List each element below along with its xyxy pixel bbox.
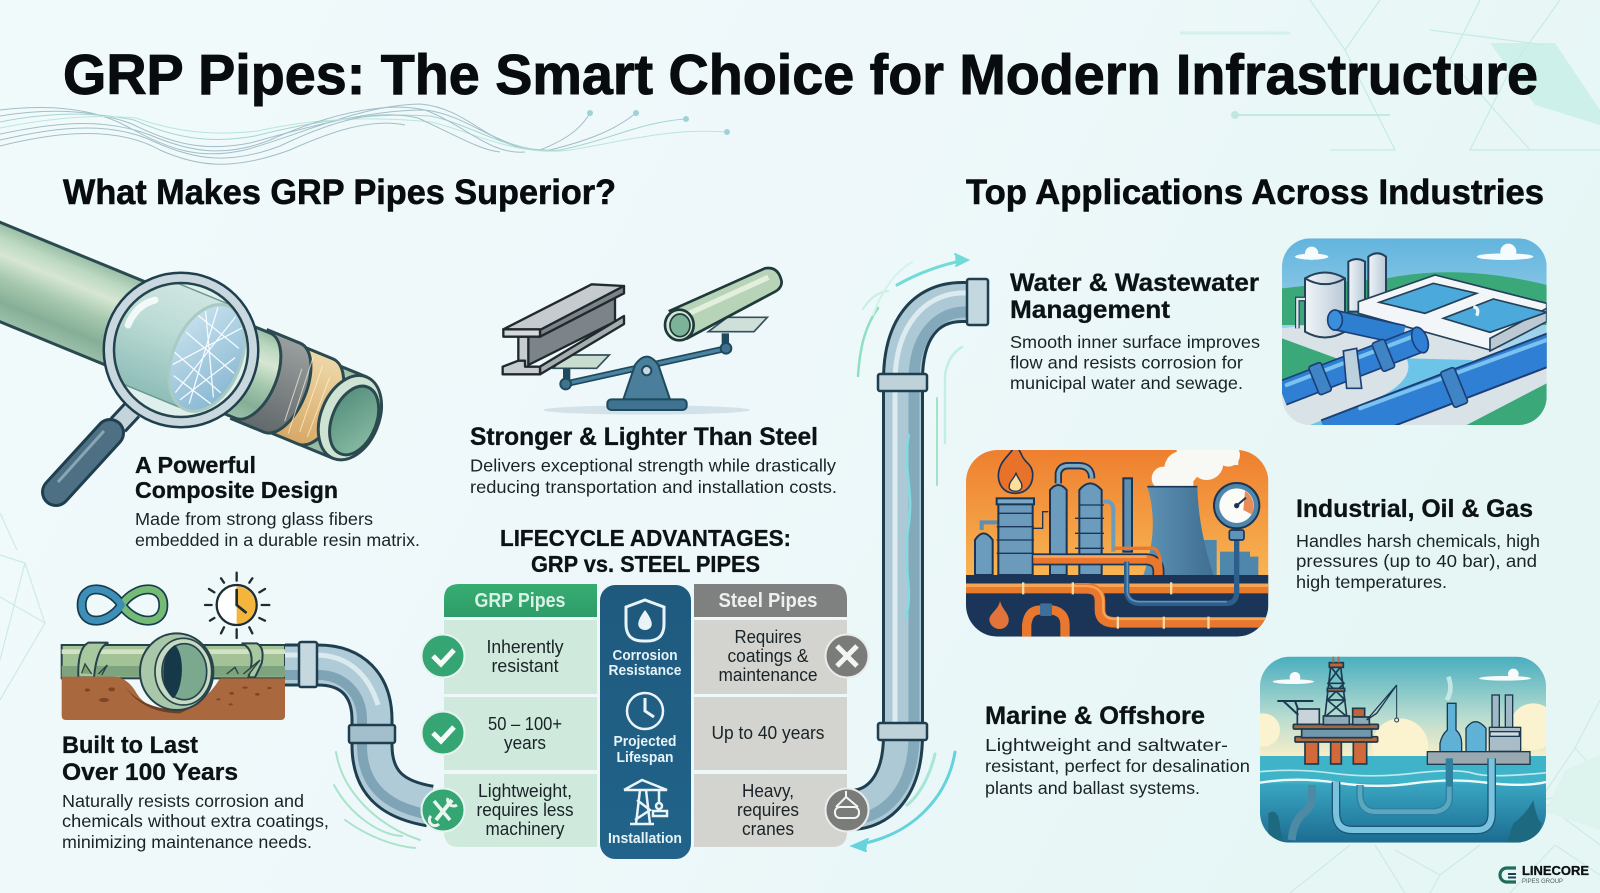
illustration: tall right pipe <box>850 254 988 851</box>
GRP column: 50 – 100+ <box>488 714 562 734</box>
illustration: oil and gas plant <box>966 443 1268 637</box>
steam <box>1152 450 1240 486</box>
steel column: Steel Pipes <box>718 590 818 612</box>
text block: built to last: Built to Last <box>62 732 198 759</box>
steel column <box>694 584 847 847</box>
steel column: coatings & <box>728 646 808 666</box>
steel I-beam <box>503 284 624 374</box>
application text: water: Water & Wastewater <box>1010 269 1259 297</box>
heading: right section: Top Applications Across Industries <box>966 173 1544 212</box>
GRP column: Lightweight, <box>478 781 572 801</box>
upper orange pipe <box>1033 546 1164 575</box>
center category column: Projected <box>614 734 676 750</box>
application text: industrial: Industrial, Oil & Gas <box>1296 495 1533 523</box>
icon: crane <box>624 780 667 824</box>
application text: marine: resistant, perfect for desalination <box>985 756 1250 776</box>
icon: tools <box>422 788 464 832</box>
GRP column <box>444 584 597 847</box>
text block: composite design: Made from strong glass fibers <box>135 509 373 529</box>
desalination plant <box>1447 677 1450 700</box>
application text: water: Smooth inner surface improves <box>1010 332 1260 352</box>
logo: PIPES GROUP <box>1522 878 1563 885</box>
center category column: Lifespan <box>616 750 674 766</box>
text block: composite design: A Powerful <box>135 452 256 478</box>
application text: industrial <box>1296 495 1540 592</box>
pressure gauge <box>1214 483 1259 540</box>
center category column: Installation <box>608 831 682 847</box>
application text: water: municipal water and sewage. <box>1010 373 1243 393</box>
swoosh arrows <box>852 254 968 851</box>
GRP column: requires less <box>476 800 574 820</box>
flame <box>998 443 1033 493</box>
GRP column: GRP Pipes <box>474 590 566 612</box>
application text: water <box>1010 269 1260 393</box>
icon: green check 2 <box>422 712 464 754</box>
icon: infinity <box>82 589 163 621</box>
illustration: balance scale steel vs GRP <box>503 268 782 415</box>
steel column: requires <box>737 800 799 820</box>
decorative wave dots <box>587 110 730 135</box>
tanks <box>1297 253 1386 337</box>
icon: clock and sun <box>205 573 269 638</box>
lower pipes <box>1027 538 1268 637</box>
center category column <box>598 584 692 860</box>
icon: clock <box>627 693 663 729</box>
application text: marine <box>985 702 1250 798</box>
application text: marine: Lightweight and saltwater- <box>985 735 1228 755</box>
blue pipes <box>1282 320 1557 435</box>
logo mark <box>1500 868 1516 882</box>
illustration: lower-left transparent pipe <box>285 642 430 848</box>
steel column: Requires <box>734 627 802 647</box>
pipe layers <box>0 212 396 471</box>
icon: shield <box>626 600 664 641</box>
steel column: cranes <box>742 819 794 839</box>
rig <box>1277 650 1399 764</box>
icon: grey cross <box>826 634 868 678</box>
GRP pipe <box>665 268 782 340</box>
GRP column: years <box>504 733 546 753</box>
decorative wave lines <box>0 104 727 164</box>
text block: built to last: Naturally resists corrosion and <box>62 791 304 811</box>
text block: composite design: Composite Design <box>135 477 338 503</box>
icon: green check 1 <box>422 634 464 678</box>
illustration: buried pipe with icons <box>62 573 285 720</box>
application text: industrial: Handles harsh chemicals, high <box>1296 531 1540 551</box>
application text: industrial: high temperatures. <box>1296 572 1447 592</box>
text block: stronger and lighter <box>470 423 837 497</box>
text block: built to last <box>62 732 329 852</box>
water stream <box>1310 358 1473 425</box>
illustration: offshore rig and desalination <box>1260 656 1546 843</box>
subsea pipes <box>1292 758 1492 840</box>
flanges <box>967 279 988 325</box>
basin <box>1358 275 1547 351</box>
application text: water: flow and resists corrosion for <box>1010 352 1243 372</box>
application text: marine: Marine & Offshore <box>985 702 1205 730</box>
center category column: Resistance <box>608 663 682 679</box>
text block: built to last: minimizing maintenance needs. <box>62 832 312 852</box>
application text: industrial: pressures (up to 40 bar), and <box>1296 551 1537 571</box>
pipe and soil <box>62 633 285 720</box>
illustration: composite pipe with magnifier <box>0 212 396 492</box>
decorative top-right geometry <box>1180 0 1600 150</box>
towers <box>975 466 1258 575</box>
GRP column: machinery <box>486 819 564 839</box>
motion swooshes <box>334 752 420 848</box>
magnifier lens <box>104 273 258 427</box>
heading: lifecycle advantages <box>500 525 791 577</box>
decorative left and bottom-right geometry <box>0 513 1600 893</box>
illustration: water treatment <box>1282 238 1557 435</box>
heading: lifecycle advantages: LIFECYCLE ADVANTAGES: <box>500 525 791 551</box>
text block: composite design: embedded in a durable resin matrix. <box>135 530 420 550</box>
logo: LINECORE <box>1522 863 1589 878</box>
magnifier handle <box>56 410 132 492</box>
text block: built to last: chemicals without extra coatings, <box>62 811 329 831</box>
text block: stronger and lighter: Stronger & Lighter Than Steel <box>470 423 818 451</box>
GRP column: Inherently <box>486 637 564 657</box>
heading: lifecycle advantages: GRP vs. STEEL PIPES <box>531 551 760 577</box>
center category column: Corrosion <box>612 648 678 664</box>
text block: composite design <box>135 452 420 550</box>
steel column: maintenance <box>718 665 818 685</box>
comparison table <box>422 584 868 860</box>
icon: grey load <box>826 788 868 832</box>
GRP column: resistant <box>492 656 558 676</box>
text block: stronger and lighter: reducing transportation and installation costs. <box>470 477 837 497</box>
application text: marine: plants and ballast systems. <box>985 778 1200 798</box>
text block: built to last: Over 100 Years <box>62 759 238 786</box>
text block: stronger and lighter: Delivers exceptional strength while drastically <box>470 456 836 476</box>
heading: left section: What Makes GRP Pipes Superior? <box>63 173 616 212</box>
application text: water: Management <box>1010 296 1171 324</box>
logo <box>1500 863 1589 885</box>
ground <box>966 575 1268 637</box>
steel column: Up to 40 years <box>712 723 824 743</box>
steel column: Heavy, <box>742 781 794 801</box>
title: GRP Pipes: The Smart Choice for Modern Infrastructure <box>63 43 1538 107</box>
pipe flanges <box>299 642 317 687</box>
